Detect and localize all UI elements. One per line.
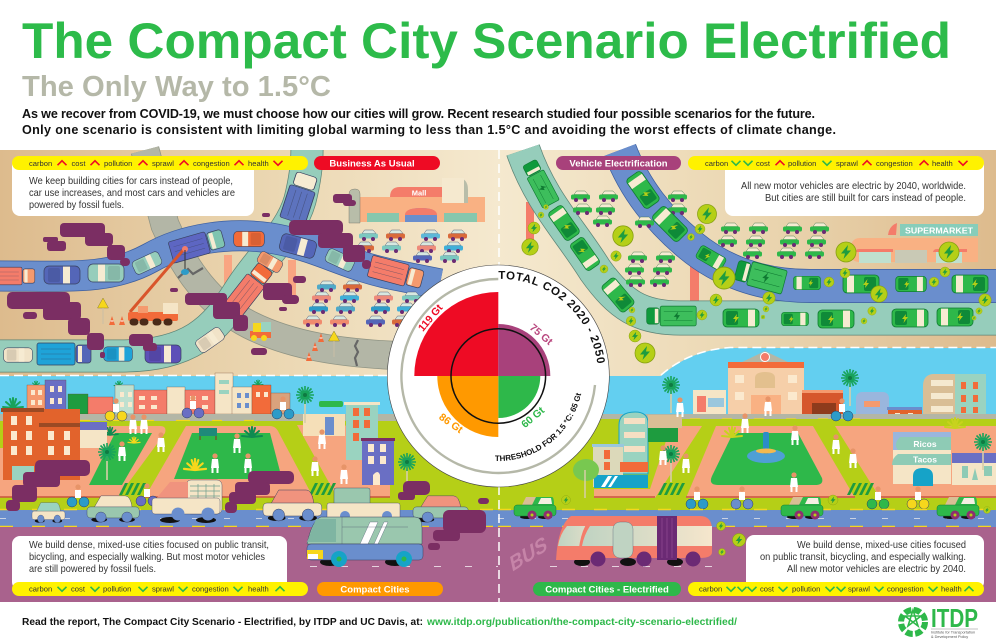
sky <box>498 348 996 420</box>
impact bar: business as usual: congestion <box>193 159 230 168</box>
impact bar: vehicle electrification: pollution <box>788 159 816 168</box>
intro text: Only one scenario is consistent with limiting global warming to less than 1.5°C and avoiding the worst effects of climate change. <box>22 123 836 137</box>
parked green cars <box>571 191 829 287</box>
mall <box>349 178 485 223</box>
skyline buildings <box>693 351 986 433</box>
scenario pill: compact cities <box>317 582 443 596</box>
callout: compact cities electrified <box>746 535 984 590</box>
electric vehicles <box>521 158 988 328</box>
exhaust smoke <box>6 460 489 550</box>
quadrant: compact cities electrified 60 Gt <box>498 376 540 418</box>
panel: compact cities electrified scene <box>498 348 996 602</box>
shop and right buildings <box>80 401 395 485</box>
parked cars lot <box>303 230 467 327</box>
impact bar: compact cities electrified: health <box>941 584 962 594</box>
intro text: As we recover from COVID-19, we must choose how our cities will grow. Recent research studied four possible scenarios for the future. <box>22 107 815 121</box>
purple foreground <box>0 527 498 602</box>
taco shop <box>892 432 996 486</box>
callout: compact cities: We build dense, mixed-use cities focused on public transit, <box>29 540 269 551</box>
crosswalks <box>119 483 336 495</box>
trees <box>573 369 992 498</box>
teal road <box>523 150 996 318</box>
small bolt badges <box>562 495 990 556</box>
mall: Mall <box>412 188 426 198</box>
sky <box>0 376 498 421</box>
road with lane marks <box>0 510 498 528</box>
scenario pill: compact cities electrified <box>533 582 681 596</box>
park plants <box>102 427 262 470</box>
impact bar: vehicle electrification <box>688 156 984 170</box>
impact bar: business as usual: carbon <box>29 159 52 168</box>
yellow work vehicle <box>250 322 271 341</box>
callout: compact cities electrified: on public transit, bicycling, and especially walking. <box>760 552 966 563</box>
callout: compact cities electrified: All new motor vehicles are electric by 2040. <box>787 564 966 575</box>
impact bar: compact cities: carbon <box>29 584 52 594</box>
cafe building <box>592 412 682 488</box>
icon: logo wheel <box>901 610 925 634</box>
blue road <box>620 150 996 286</box>
gray sidewalk <box>0 414 498 421</box>
crosswalks <box>658 483 874 495</box>
gray sidewalk <box>498 414 996 421</box>
pink road columns <box>526 202 699 302</box>
impact bar: compact cities electrified: congestion <box>887 584 924 594</box>
teal road <box>0 150 307 356</box>
skyline buildings <box>27 373 290 414</box>
taco shop: Tacos <box>913 454 937 464</box>
callout: compact cities: are still powered by fossil fuels. <box>29 564 156 575</box>
impact bar: business as usual: sprawl <box>152 159 174 168</box>
impact bar: compact cities electrified <box>688 582 984 596</box>
impact bar: compact cities: cost <box>71 584 86 594</box>
intro text <box>22 107 836 137</box>
value labels: 60 Gt <box>519 404 547 431</box>
electric cars <box>514 497 979 520</box>
peach plazas <box>0 425 390 497</box>
skyline windows <box>31 380 268 409</box>
impact bar: business as usual <box>12 156 308 170</box>
impact bar: business as usual: health <box>248 159 269 168</box>
palm trees <box>98 386 416 490</box>
impact bar: vehicle electrification: sprawl <box>836 159 858 168</box>
callout: business as usual: car use increases, and most cars and vehicles are <box>29 188 235 199</box>
callout: compact cities electrified: We build dense, mixed-use cities focused <box>797 540 966 551</box>
impact bar: compact cities electrified: pollution <box>792 584 820 594</box>
impact bar: compact cities: congestion <box>192 584 229 594</box>
impact bar: business as usual: pollution <box>104 159 132 168</box>
value labels: 75 Gt <box>527 322 555 348</box>
ITDP logo: ITDP <box>931 603 978 633</box>
impact bar: compact cities electrified: carbon <box>699 584 722 594</box>
purple foreground <box>498 527 996 602</box>
value labels: 119 Gt <box>416 302 446 334</box>
impact bar: compact cities electrified: sprawl <box>848 584 870 594</box>
park plants <box>722 418 965 437</box>
pink road columns <box>224 255 296 295</box>
road signs and cones <box>98 298 340 361</box>
crane truck <box>128 246 189 322</box>
panel: business as usual scene <box>0 150 498 376</box>
impact bar: compact cities electrified: cost <box>760 584 775 594</box>
exhaust smoke <box>7 194 371 358</box>
gray ring <box>401 279 595 473</box>
impact bar: compact cities: health <box>248 584 269 594</box>
impact bar: vehicle electrification: congestion <box>876 159 913 168</box>
park <box>711 433 822 485</box>
charging bolt badges <box>522 204 991 363</box>
callout: compact cities <box>12 536 287 590</box>
center divider <box>498 150 500 602</box>
traffic vehicles <box>0 171 425 365</box>
callout: business as usual <box>12 156 254 216</box>
callout: business as usual: powered by fossil fuels. <box>29 200 124 211</box>
quadrant: vehicle electrification 75 Gt <box>498 324 550 376</box>
arc heading: TOTAL CO2 2020 - 2050 <box>498 271 605 363</box>
supermarket <box>850 223 978 263</box>
scenario pill: business as usual: Business As Usual <box>329 158 415 170</box>
threshold circle <box>451 329 546 423</box>
impact bar: vehicle electrification: carbon <box>705 159 728 168</box>
articulated electric bus <box>556 516 712 566</box>
panel: vehicle electrification scene <box>498 150 996 376</box>
gray broken road <box>145 150 410 356</box>
threshold label: THRESHOLD FOR 1.5 °C: 65 Gt <box>495 392 582 462</box>
orange apartment building <box>1 408 82 480</box>
ITDP logo: & Development Policy <box>931 635 968 639</box>
callout: business as usual: We keep building cities for cars instead of people, <box>29 176 233 187</box>
peach plazas <box>594 426 996 498</box>
impact bar: vehicle electrification: health <box>932 159 953 168</box>
blue road <box>0 236 440 284</box>
callout: vehicle electrification: All new motor vehicles are electric by 2040, worldwide. <box>741 181 966 192</box>
callout: vehicle electrification <box>725 156 984 216</box>
value labels <box>416 302 555 436</box>
bus road marking: BUS <box>508 531 549 577</box>
impact bar: business as usual: cost <box>72 159 86 168</box>
fountain <box>747 432 785 463</box>
road with lane marks <box>498 510 996 528</box>
impact bar: compact cities: pollution <box>103 584 131 594</box>
green ground <box>0 421 498 511</box>
scenario pill: vehicle electrification: Vehicle Electrification <box>569 158 668 170</box>
city bus <box>307 517 423 567</box>
scenario pill: compact cities: Compact Cities <box>340 584 410 596</box>
street vehicles <box>32 480 468 523</box>
value labels: 86 Gt <box>437 411 465 436</box>
park bench <box>199 428 217 440</box>
supermarket: SUPERMARKET <box>905 226 974 236</box>
callout: vehicle electrification: But cities are still built for cars instead of people. <box>765 193 966 204</box>
pedestrians and cyclists <box>67 395 348 507</box>
scenario pill: compact cities electrified: Compact Cities - Electrified <box>545 584 669 596</box>
title: The Compact City Scenario Electrified <box>22 13 951 69</box>
footer link text: Read the report, The Compact City Scenario - Electrified, by ITDP and UC Davis, at: <box>22 616 423 628</box>
pedestrians and cyclists <box>659 396 929 509</box>
impact bar: vehicle electrification: cost <box>756 159 771 168</box>
panel: compact cities scene <box>0 373 498 602</box>
quadrant: compact cities 86 Gt <box>437 376 498 437</box>
ITDP logo <box>901 603 978 639</box>
callout: compact cities: bicycling, and especially walking. But most motor vehicles <box>29 552 265 563</box>
parks <box>89 433 152 485</box>
taco shop: Ricos <box>913 439 937 449</box>
subtitle: The Only Way to 1.5°C <box>22 71 331 103</box>
scenario pill: vehicle electrification <box>556 156 681 170</box>
footer link text: www.itdp.org/publication/the-compact-city-scenario-electrified/ <box>426 616 737 628</box>
impact bar: compact cities: sprawl <box>152 584 174 594</box>
ITDP logo: Institute for Transportation <box>931 630 975 634</box>
rooftop plants <box>3 380 263 408</box>
impact bar: compact cities <box>12 582 308 596</box>
circular CO2 chart <box>387 264 610 488</box>
green ground <box>498 419 996 511</box>
quadrant: business as usual 119 Gt <box>414 292 498 376</box>
scenario pill: business as usual <box>314 156 440 170</box>
